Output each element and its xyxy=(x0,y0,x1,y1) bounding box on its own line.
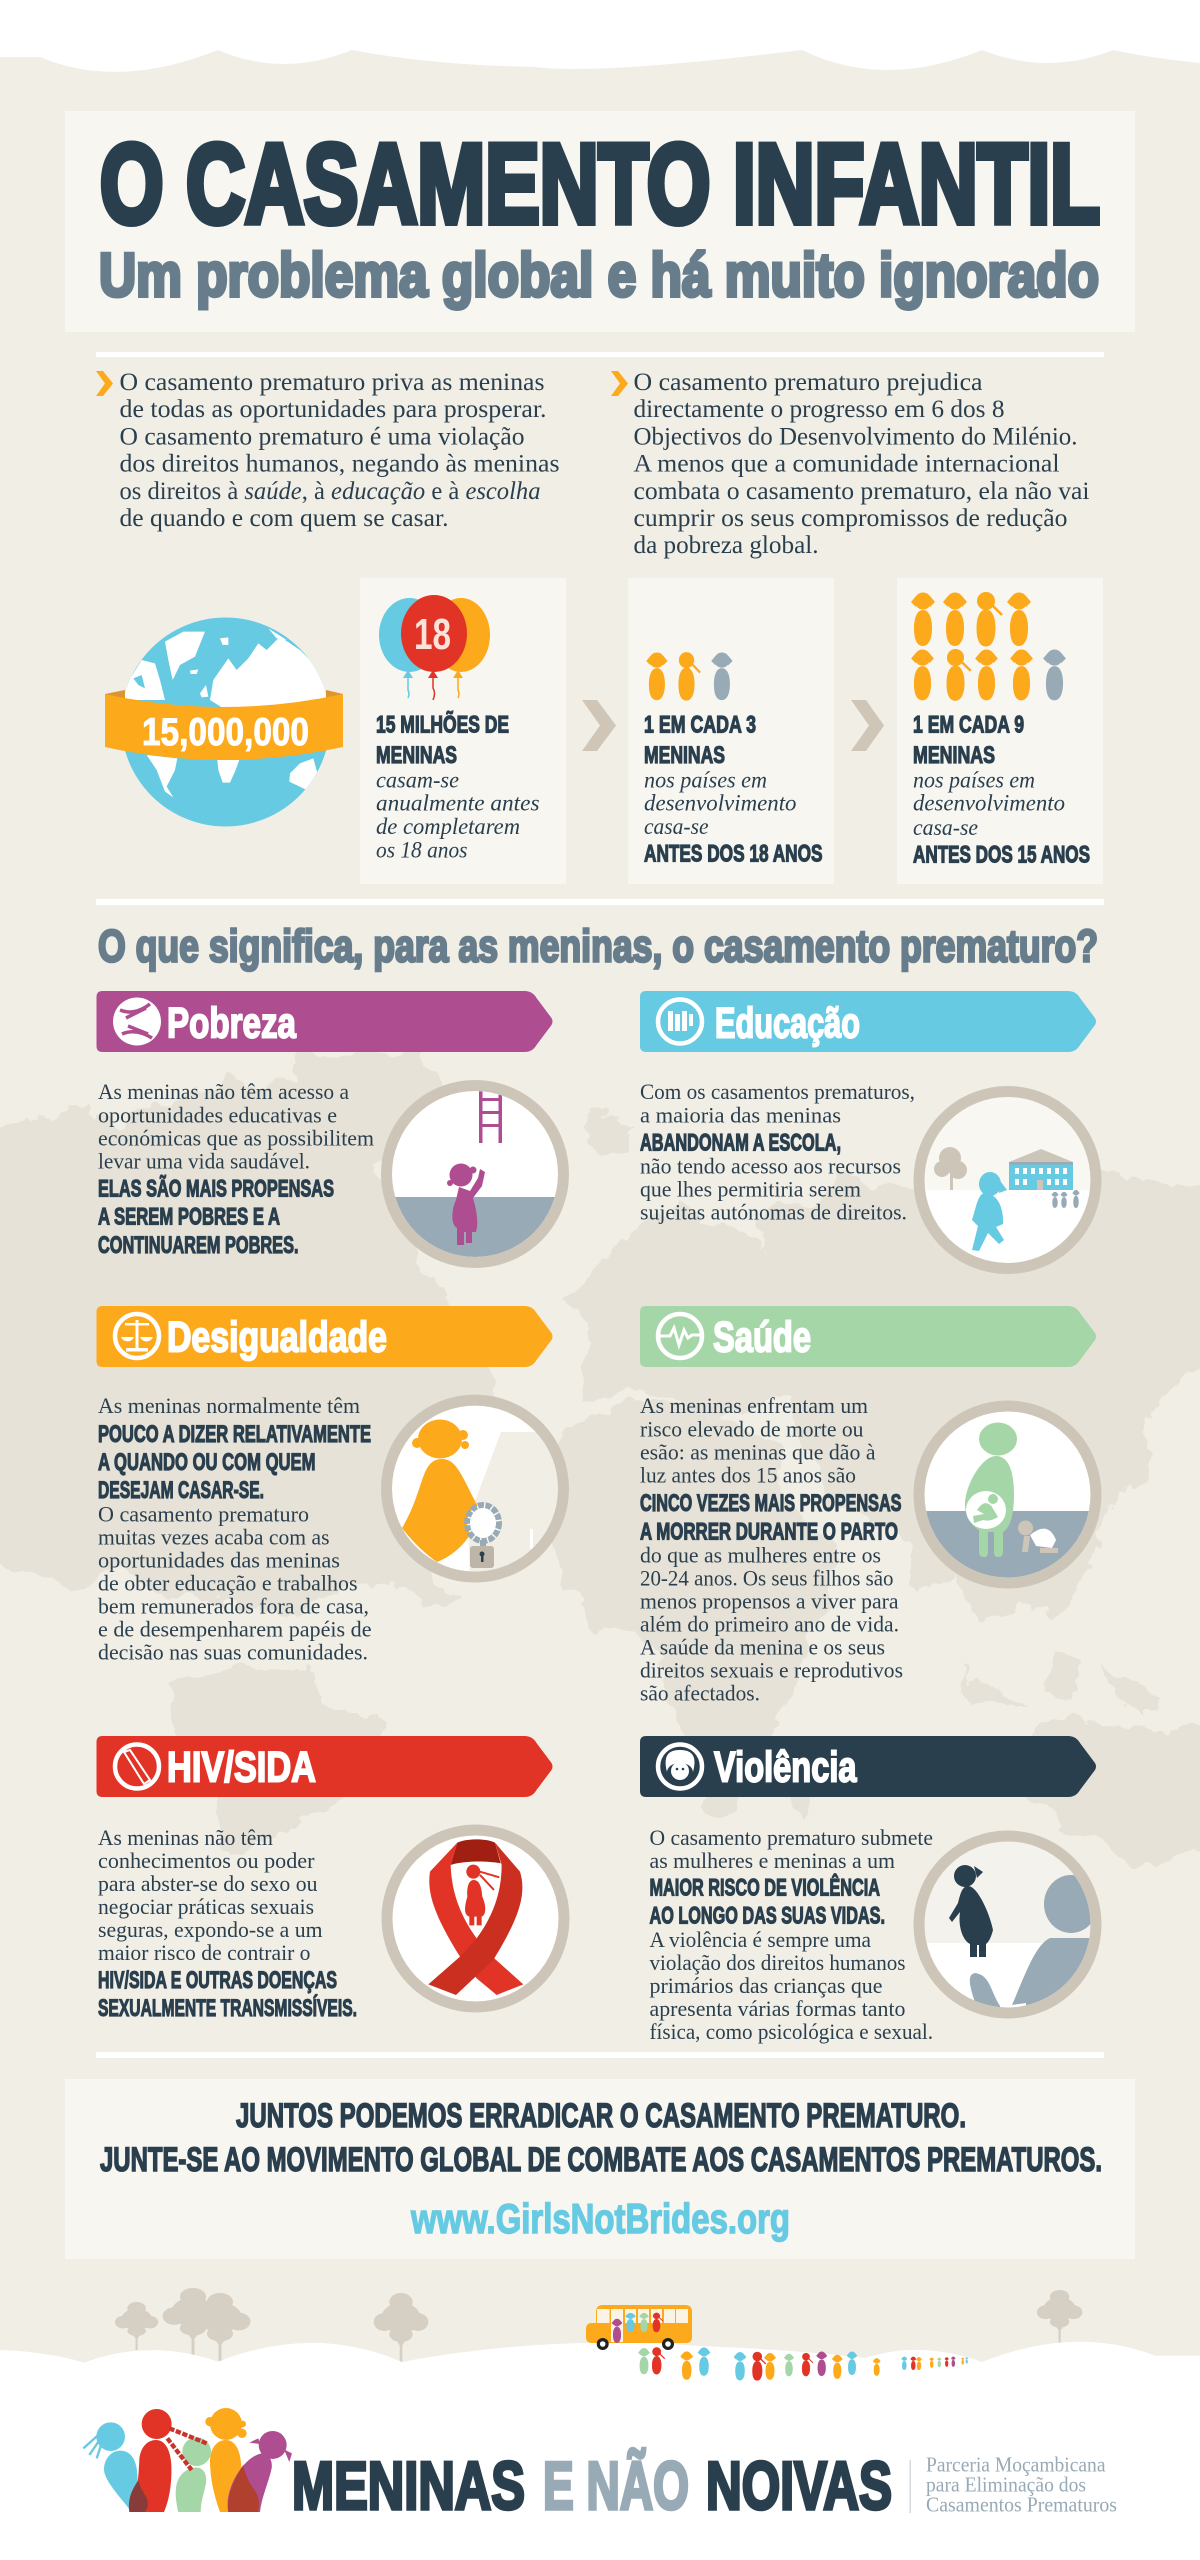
panel: 1 em cada 3: 1 EM CADA 3 xyxy=(644,712,756,738)
text: Educação xyxy=(640,1079,915,1224)
text: Saúde: menos propensos a viver para xyxy=(640,1588,899,1614)
illustration: girl leaving school xyxy=(919,1090,1100,1280)
icon: hands xyxy=(113,998,161,1046)
text: Pobreza: levar uma vida saudável. xyxy=(98,1148,310,1174)
text: Desigualdade: POUCO A DIZER RELATIVAMENTE xyxy=(98,1421,371,1448)
text: HIV/SIDA: negociar práticas sexuais xyxy=(98,1894,314,1919)
logo tagline: para Eliminação dos xyxy=(926,2472,1086,2496)
text: Saúde: luz antes dos 15 anos são xyxy=(640,1462,856,1488)
header: Violência: Violência xyxy=(714,1744,857,1792)
logo wordmark: NOIVAS xyxy=(706,2448,892,2524)
panel: 1 em cada 9: MENINAS xyxy=(913,742,995,769)
panel: 15 milhões: os 18 anos xyxy=(376,838,468,864)
intro text right: A menos que a comunidade internacional xyxy=(634,451,1060,478)
logo tagline xyxy=(926,2452,1117,2516)
header: Educação: Educação xyxy=(715,1000,860,1048)
line of girls xyxy=(638,2347,968,2380)
arrow xyxy=(851,700,884,751)
text: Desigualdade: A QUANDO OU COM QUEM xyxy=(98,1449,316,1476)
trees xyxy=(115,2288,1082,2362)
logo tagline: Casamentos Prematuros xyxy=(926,2492,1117,2516)
intro text right: O casamento prematuro prejudica xyxy=(634,369,982,396)
header: Desigualdade: Desigualdade xyxy=(167,1314,387,1362)
logo wordmark: MENINAS xyxy=(292,2448,525,2524)
header: Pobreza: Pobreza xyxy=(167,1000,297,1048)
text: Pobreza: CONTINUAREM POBRES. xyxy=(98,1232,298,1259)
text: Violência xyxy=(650,1825,933,2044)
panel: 15 milhões: de completarem xyxy=(376,814,520,840)
text: Desigualdade: oportunidades das meninas xyxy=(98,1548,340,1572)
text: Pobreza: ELAS SÃO MAIS PROPENSAS xyxy=(98,1174,334,1202)
stat: 15,000,000: 15,000,000 xyxy=(142,711,309,754)
icon: scales xyxy=(115,1314,159,1358)
panel: 1 em cada 3: ANTES DOS 18 ANOS xyxy=(644,841,822,868)
intro text right xyxy=(611,369,1090,559)
header: HIV/SIDA: HIV/SIDA xyxy=(167,1744,316,1792)
panel: 1 em cada 3 xyxy=(628,578,834,884)
header: HIV/SIDA xyxy=(96,1736,552,1797)
header: Violência xyxy=(640,1736,1096,1797)
text: HIV/SIDA xyxy=(98,1825,357,2022)
text: HIV/SIDA: SEXUALMENTE TRANSMISSÍVEIS. xyxy=(98,1994,357,2022)
text: HIV/SIDA: para abster-se do sexo ou xyxy=(98,1871,318,1896)
intro text right: da pobreza global. xyxy=(634,532,818,559)
panel: 15 milhões: MENINAS xyxy=(376,742,457,769)
logo wordmark xyxy=(292,2448,892,2524)
icon: condom xyxy=(115,1744,159,1788)
text: Pobreza xyxy=(98,1079,374,1259)
intro text left: O casamento prematuro é uma violação xyxy=(120,423,524,450)
call to action panel xyxy=(65,2079,1135,2259)
school bus xyxy=(586,2305,692,2350)
background world map xyxy=(0,1050,1200,1870)
text: Educação: sujeitas autónomas de direitos. xyxy=(640,1200,907,1224)
top wave xyxy=(0,0,1200,72)
text: Desigualdade: bem remunerados fora de casa, xyxy=(98,1594,369,1618)
illustration: pregnant girl xyxy=(919,1405,1100,1596)
header: Saúde: Saúde xyxy=(713,1314,811,1362)
text: Educação: a maioria das meninas xyxy=(640,1102,841,1128)
intro text right: combata o casamento prematuro, ela não vai xyxy=(634,478,1090,505)
intro text left: O casamento prematuro priva as meninas xyxy=(120,369,544,396)
header: Educação xyxy=(640,991,1096,1052)
icon: balloons xyxy=(379,595,490,700)
header: Desigualdade xyxy=(96,1306,552,1367)
text: HIV/SIDA: HIV/SIDA E OUTRAS DOENÇAS xyxy=(98,1967,337,1994)
header: Pobreza xyxy=(96,991,552,1052)
text: Violência: física, como psicológica e sexual. xyxy=(650,2019,933,2044)
panel: 1 em cada 9: 1 EM CADA 9 xyxy=(913,712,1024,738)
text: HIV/SIDA: conhecimentos ou poder xyxy=(98,1848,315,1873)
bottom wave xyxy=(0,2342,1200,2560)
text: Violência: A violência é sempre uma xyxy=(650,1927,871,1952)
text: Desigualdade: DESEJAM CASAR-SE. xyxy=(98,1477,264,1504)
text: Desigualdade: muitas vezes acaba com as xyxy=(98,1524,330,1550)
logo: five girls xyxy=(83,2408,292,2512)
icon: balloons: 18 xyxy=(414,610,451,659)
icon: three girls xyxy=(646,653,733,700)
intro text right: directamente o progresso em 6 dos 8 xyxy=(634,396,1004,423)
text: Pobreza: oportunidades educativas e xyxy=(98,1102,337,1128)
icon: chevron xyxy=(96,371,113,396)
text: Pobreza: A SEREM POBRES E A xyxy=(98,1204,280,1230)
text: Desigualdade: O casamento prematuro xyxy=(98,1502,309,1526)
text: Violência: AO LONGO DAS SUAS VIDAS. xyxy=(650,1902,885,1930)
text: Violência: O casamento prematuro submete xyxy=(650,1825,933,1850)
panel: 15 milhões: 15 MILHÕES DE xyxy=(376,710,509,738)
text: Saúde: As meninas enfrentam um xyxy=(640,1393,868,1418)
illustration: girl and adult xyxy=(914,1830,1102,2018)
icon: face xyxy=(658,1744,702,1788)
text: Saúde: do que as mulheres entre os xyxy=(640,1542,881,1568)
text: Saúde xyxy=(640,1393,903,1706)
panel: 1 em cada 3: MENINAS xyxy=(644,742,725,769)
panel: 15 milhões xyxy=(360,578,566,884)
text: Educação: Com os casamentos prematuros, xyxy=(640,1079,915,1104)
text: Violência: as mulheres e meninas a um xyxy=(650,1848,895,1873)
logo wordmark: E NÃO xyxy=(543,2448,689,2524)
text: Saúde: esão: as meninas que dão à xyxy=(640,1440,876,1464)
text: Saúde: são afectados. xyxy=(640,1680,760,1706)
panel: 1 em cada 9: ANTES DOS 15 ANOS xyxy=(913,842,1090,869)
text: Saúde: direitos sexuais e reprodutivos xyxy=(640,1658,903,1682)
panel: 1 em cada 3: desenvolvimento xyxy=(644,790,797,816)
ribbon xyxy=(105,690,343,702)
website link: www.GirlsNotBrides.org xyxy=(410,2195,790,2242)
intro text left: dos direitos humanos, negando às meninas xyxy=(120,451,560,478)
text: Desigualdade xyxy=(98,1393,372,1664)
globe with ribbon xyxy=(105,618,343,826)
text: Educação: que lhes permitiria serem xyxy=(640,1176,861,1202)
text: Pobreza: As meninas não têm acesso a xyxy=(98,1079,349,1104)
text: Saúde: CINCO VEZES MAIS PROPENSAS xyxy=(640,1490,902,1517)
text: Violência: apresenta várias formas tanto xyxy=(650,1996,906,2021)
text: Saúde: 20-24 anos. Os seus filhos são xyxy=(640,1566,894,1590)
text: Violência: primários das crianças que xyxy=(650,1973,882,1998)
intro text left: os direitos à saúde, à educação e à escolha xyxy=(120,478,540,505)
panel: 1 em cada 3: nos países em xyxy=(644,768,767,794)
icon: chevron xyxy=(611,371,628,396)
logo tagline: Parceria Moçambicana xyxy=(926,2452,1106,2476)
icon: nine girls xyxy=(911,592,1066,700)
panel: 1 em cada 9: nos países em xyxy=(913,768,1035,794)
text: Educação: não tendo acesso aos recursos xyxy=(640,1154,901,1178)
illustration: red ribbon xyxy=(387,1830,564,2007)
intro text left: de quando e com quem se casar. xyxy=(120,505,448,532)
illustration: girl with chain and lock xyxy=(385,1400,570,1580)
text: Saúde: A MORRER DURANTE O PARTO xyxy=(640,1518,898,1546)
arrow xyxy=(582,700,616,751)
intro text right: Objectivos do Desenvolvimento do Milénio. xyxy=(634,423,1078,450)
text: HIV/SIDA: maior risco de contrair o xyxy=(98,1940,310,1965)
panel: 1 em cada 9: casa-se xyxy=(913,815,978,841)
text: Desigualdade: decisão nas suas comunidades. xyxy=(98,1640,368,1664)
illustration: girl and ladder xyxy=(385,1085,565,1272)
icon: pulse xyxy=(658,1314,702,1358)
title panel xyxy=(65,111,1135,332)
intro text left xyxy=(96,369,560,532)
text: Saúde: risco elevado de morte ou xyxy=(640,1416,864,1442)
text: Educação: ABANDONAM A ESCOLA, xyxy=(640,1130,841,1156)
text: Desigualdade: As meninas normalmente têm xyxy=(98,1393,360,1418)
panel: 1 em cada 9: desenvolvimento xyxy=(913,790,1065,816)
icon: continents xyxy=(120,628,330,797)
text: HIV/SIDA: As meninas não têm xyxy=(98,1825,273,1850)
intro text left: de todas as oportunidades para prosperar. xyxy=(120,396,546,423)
header: Saúde xyxy=(640,1306,1096,1367)
panel: 15 milhões: casam-se xyxy=(376,768,459,794)
intro text right: cumprir os seus compromissos de redução xyxy=(634,505,1068,532)
panel: 1 em cada 3: casa-se xyxy=(644,814,708,840)
text: Pobreza: económicas que as possibilitem xyxy=(98,1126,374,1150)
panel: 1 em cada 9 xyxy=(897,578,1103,884)
text: Desigualdade: de obter educação e trabalhos xyxy=(98,1570,358,1596)
text: Saúde: A saúde da menina e os seus xyxy=(640,1634,885,1660)
text: Desigualdade: e de desempenharem papéis de xyxy=(98,1616,372,1642)
text: Violência: violação dos direitos humanos xyxy=(650,1950,906,1975)
icon: school xyxy=(658,1000,702,1044)
panel: 15 milhões: anualmente antes xyxy=(376,790,540,816)
text: Saúde: além do primeiro ano de vida. xyxy=(640,1612,899,1636)
text: Violência: MAIOR RISCO DE VIOLÊNCIA xyxy=(650,1874,880,1902)
text: HIV/SIDA: seguras, expondo-se a um xyxy=(98,1917,323,1942)
